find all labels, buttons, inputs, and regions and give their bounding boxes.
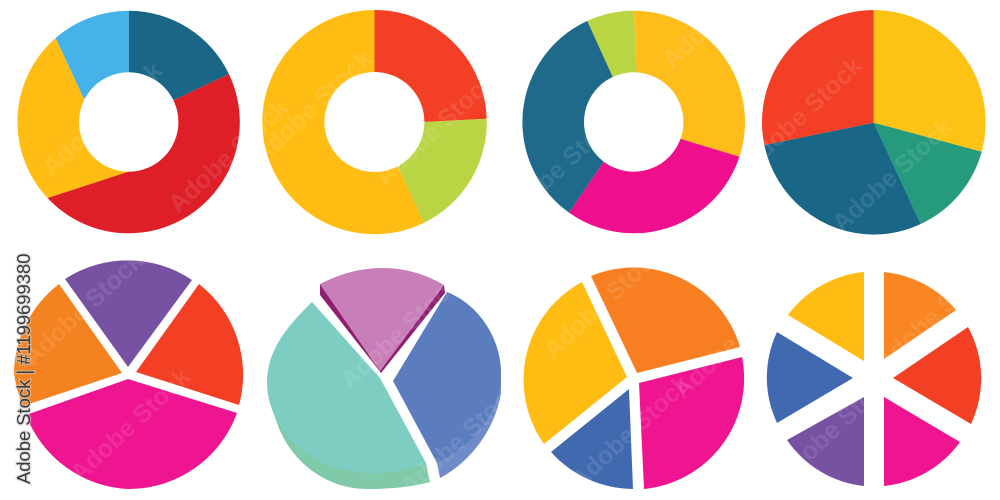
segment: red bbox=[762, 10, 874, 145]
top: blue segment bbox=[393, 292, 501, 463]
watermarks: Adobe Stock bbox=[737, 52, 868, 176]
watermarks: Adobe Stock bbox=[18, 247, 149, 371]
watermarks: Adobe Stock bbox=[770, 365, 901, 489]
segment: dark blue bbox=[764, 123, 921, 235]
segment: dark blue bbox=[129, 11, 229, 100]
top: teal segment bbox=[267, 302, 426, 473]
segment: yellow bbox=[788, 272, 864, 361]
side: teal segment bbox=[273, 410, 430, 489]
segment: red bbox=[893, 327, 981, 424]
segment: lime bbox=[587, 11, 637, 77]
segment: blue bbox=[551, 389, 633, 489]
watermarks: Adobe Stock bbox=[538, 240, 669, 364]
segment: purple bbox=[787, 397, 864, 486]
segment: crimson bbox=[48, 74, 240, 233]
segment: red bbox=[374, 10, 487, 122]
donut chart 3 bbox=[522, 11, 745, 233]
segment: dark blue bbox=[522, 21, 613, 213]
segment: yellow bbox=[634, 11, 745, 157]
segment: light blue bbox=[56, 11, 129, 99]
segment: magenta bbox=[639, 357, 744, 489]
watermarks: Adobe Stock bbox=[827, 113, 958, 237]
segment: blue bbox=[767, 332, 853, 423]
exploded pie 7 bbox=[524, 268, 744, 489]
segment: orange bbox=[14, 284, 122, 406]
donut chart 2 bbox=[262, 10, 487, 234]
segment: yellow bbox=[874, 10, 986, 152]
center hole bbox=[79, 72, 178, 172]
pie chart 4 bbox=[762, 10, 986, 235]
segment: red bbox=[136, 284, 243, 405]
watermarks: Adobe Stock bbox=[495, 105, 626, 229]
segment: magenta bbox=[884, 397, 960, 486]
side: purple segment bbox=[320, 284, 445, 373]
top: purple segment bbox=[320, 268, 444, 371]
watermarks: Adobe Stock bbox=[247, 45, 378, 169]
center hole bbox=[324, 72, 424, 172]
3D exploded pie bbox=[267, 268, 501, 489]
segment: magenta bbox=[26, 379, 237, 489]
donut chart 1 bbox=[17, 11, 240, 233]
watermarks: Adobe Stock bbox=[870, 252, 1000, 376]
watermarks: Adobe Stock bbox=[65, 363, 196, 487]
segment: lime bbox=[398, 119, 487, 223]
watermarks: Adobe Stock bbox=[163, 94, 294, 218]
watermarks: Adobe Stock bbox=[335, 270, 466, 394]
segment: yellow bbox=[17, 38, 128, 198]
watermarks: Adobe Stock bbox=[37, 57, 168, 181]
side: blue segment bbox=[437, 373, 501, 478]
segment: yellow bbox=[524, 282, 627, 444]
segment: orange bbox=[884, 272, 956, 359]
watermarks: Adobe Stock bbox=[370, 67, 501, 191]
center hole bbox=[584, 72, 683, 172]
segment: purple bbox=[65, 260, 192, 367]
segment: orange bbox=[591, 268, 740, 373]
segment: teal bbox=[874, 123, 982, 224]
watermarks: Adobe Stock bbox=[565, 370, 696, 494]
six-segment exploded pie bbox=[767, 272, 981, 486]
watermarks: Adobe Stock bbox=[395, 377, 526, 500]
exploded pie 5 bbox=[14, 260, 243, 489]
segment: magenta bbox=[569, 139, 740, 233]
segment: yellow bbox=[262, 10, 424, 234]
stock id label: Adobe Stock | #1199699380 bbox=[13, 254, 34, 484]
watermarks: Adobe Stock bbox=[668, 280, 799, 404]
